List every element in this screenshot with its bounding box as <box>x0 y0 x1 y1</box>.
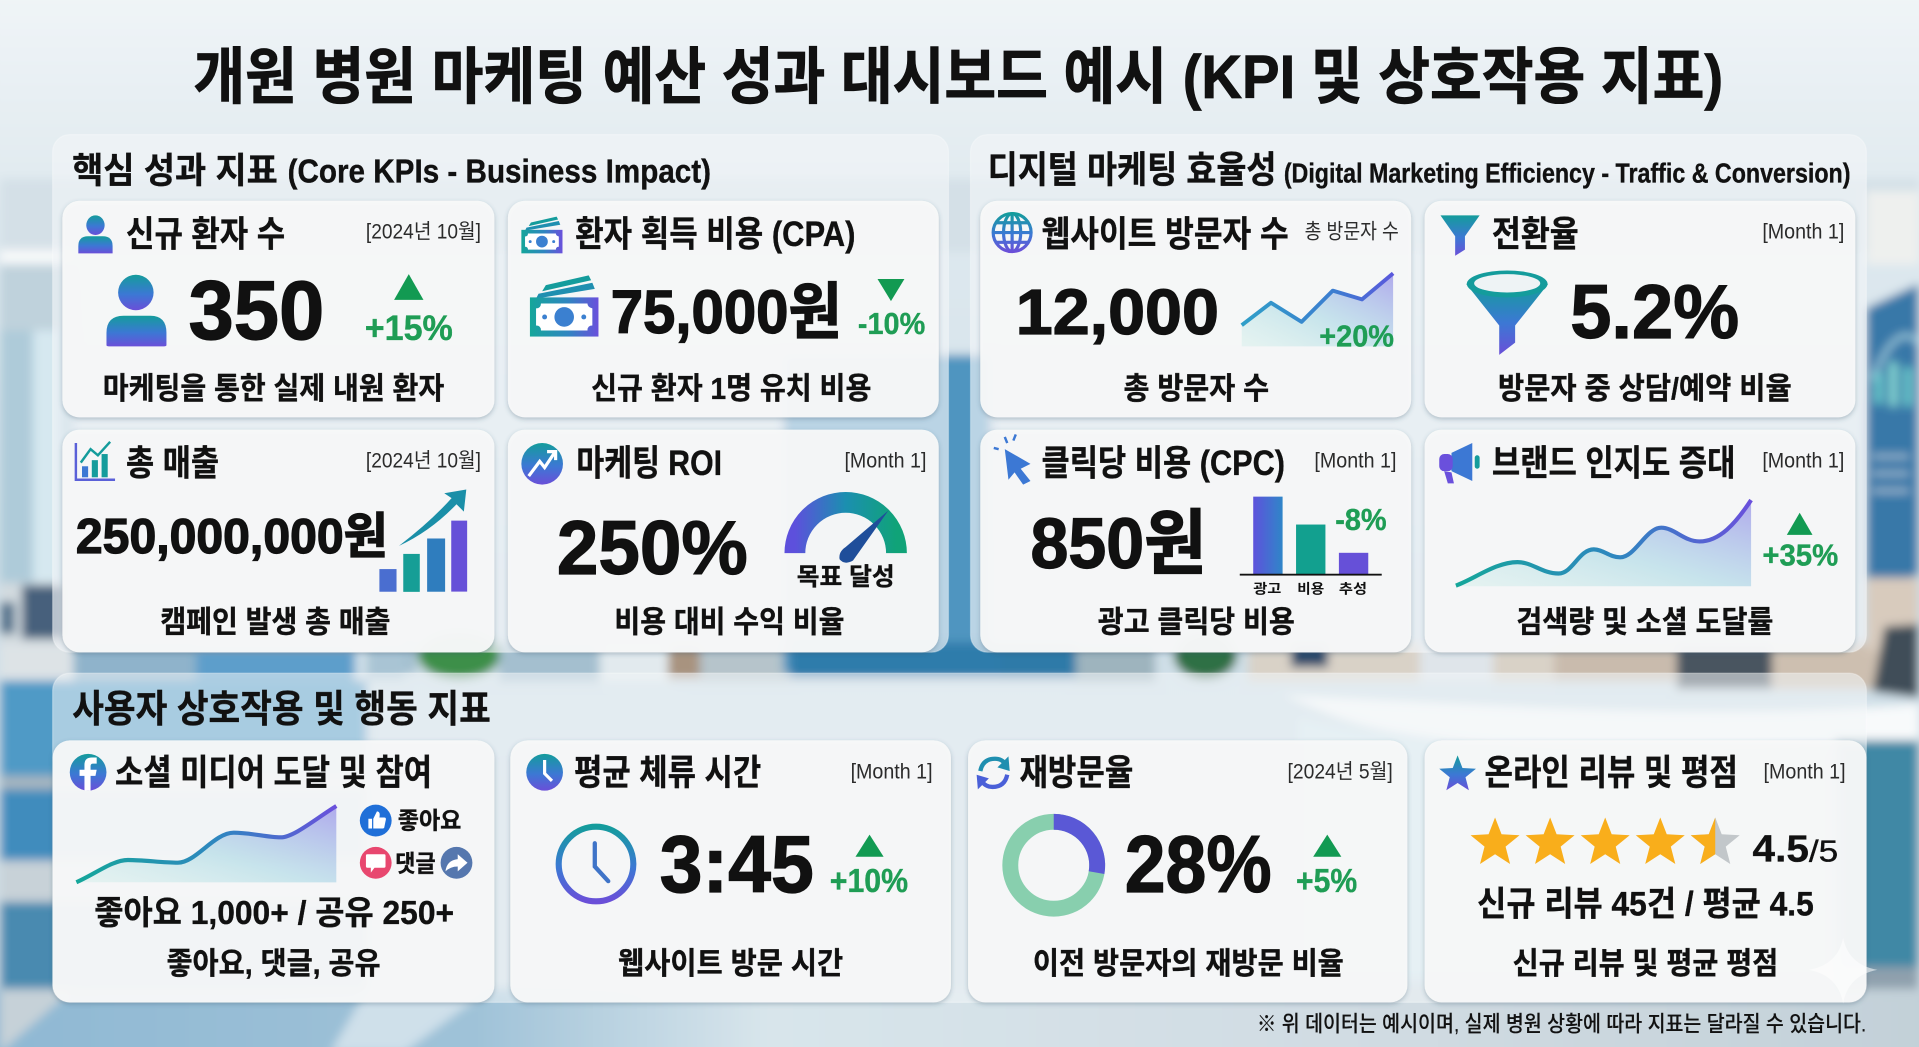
panel: core KPIs <box>53 135 948 652</box>
icon: likes: 좋아요 <box>398 808 461 834</box>
icon: clock large <box>559 827 633 901</box>
card: conversion rate: 5.2% <box>1570 270 1739 355</box>
card: return visit rate: 28% <box>1125 820 1272 910</box>
card: dwell time: 웹사이트 방문 시간 <box>618 947 843 981</box>
card: brand awareness: 검색량 및 소셜 도달률 <box>1516 606 1773 640</box>
card: dwell time: 3:45 <box>660 820 814 910</box>
heading: user interaction: 사용자 상호작용 및 행동 지표 <box>72 689 491 731</box>
card: CPA: 75,000원 <box>611 278 842 346</box>
card: marketing ROI: [Month 1] <box>844 450 926 473</box>
card: new patients: 신규 환자 수 <box>126 214 285 254</box>
chart: CPC bars: 추성 <box>1339 582 1367 597</box>
card: return visit rate: 재방문율 <box>1019 752 1133 792</box>
card: CPC: 광고 클릭당 비용 <box>1098 606 1295 640</box>
delta +10% <box>830 835 908 900</box>
card: CPC: 클릭당 비용 (CPC) <box>1041 443 1285 483</box>
heading: core KPIs: (Core KPIs - Business Impact) <box>288 153 711 190</box>
icon: cursor <box>994 434 1030 485</box>
rating value: 4.5 <box>1753 829 1809 871</box>
card: dwell time: 평균 체류 시간 <box>574 752 761 792</box>
card: conversion rate: 방문자 중 상담/예약 비율 <box>1498 372 1792 406</box>
icon: megaphone <box>1439 443 1480 483</box>
card: reviews: 온라인 리뷰 및 평점 <box>1485 752 1738 792</box>
rating value: /5 <box>1809 835 1838 869</box>
card: reviews: 신규 리뷰 45건 / 평균 4.5 <box>1477 885 1814 923</box>
icon: likes <box>360 805 461 836</box>
chart: visitors sparkline: +20% <box>1319 319 1394 353</box>
panel: digital marketing efficiency <box>971 135 1866 652</box>
card: total revenue: 총 매출 <box>126 443 219 483</box>
chart: growth bars with arrow <box>379 490 467 592</box>
card: brand awareness <box>1425 430 1855 652</box>
card: CPA: 환자 획득 비용 (CPA) <box>575 214 855 254</box>
card: CPC: 850원 <box>1030 505 1207 584</box>
icon: money small <box>521 217 562 253</box>
icon: comments and share <box>360 847 472 879</box>
chart: CPC bars: -8% <box>1335 503 1387 537</box>
card: total revenue: 캠페인 발생 총 매출 <box>160 606 390 640</box>
icon: ROI circle <box>521 443 563 485</box>
card: social media <box>53 740 494 1002</box>
card: CPC <box>980 430 1411 652</box>
icon: funnel small <box>1440 215 1480 256</box>
card: marketing ROI: 비용 대비 수익 비율 <box>614 606 844 640</box>
chart: social reach <box>76 806 336 882</box>
card: marketing ROI: 250% <box>557 506 748 591</box>
card: reviews: [Month 1] <box>1764 760 1846 783</box>
card: website visitors <box>980 201 1411 417</box>
delta -10% <box>858 279 925 341</box>
panel: user interaction <box>53 673 1866 1002</box>
gauge <box>795 502 896 591</box>
icon: person small <box>78 215 113 253</box>
card: brand awareness: 브랜드 인지도 증대 <box>1492 443 1735 483</box>
card: CPA: 신규 환자 1명 유치 비용 <box>591 372 871 406</box>
heading: digital marketing: 디지털 마케팅 효율성 <box>988 149 1276 190</box>
card: CPC: [Month 1] <box>1314 450 1396 473</box>
card: total revenue <box>62 430 494 652</box>
card: return visit rate: 이전 방문자의 재방문 비율 <box>1033 947 1344 981</box>
card: conversion rate <box>1425 201 1855 417</box>
card: website visitors: 총 방문자 수 <box>1123 372 1269 406</box>
chart: CPC bars: 광고 <box>1253 582 1281 597</box>
icon: clock small <box>526 754 563 791</box>
card: new patients <box>62 201 494 417</box>
delta +15%: +15% <box>365 308 453 348</box>
delta +10%: +10% <box>830 863 908 900</box>
gauge: 목표 달성 <box>797 563 895 591</box>
card: conversion rate: [Month 1] <box>1762 221 1844 244</box>
card: dwell time <box>510 740 951 1002</box>
delta +5% <box>1296 835 1357 900</box>
card: marketing ROI: 마케팅 ROI <box>576 443 722 483</box>
title: 개원 병원 마케팅 예산 성과 대시보드 예시 (KPI 및 상호작용 지표) <box>193 43 1723 111</box>
card: return visit rate: [2024년 5월] <box>1287 760 1393 783</box>
icon: refresh <box>977 756 1010 789</box>
icon: funnel large <box>1466 270 1548 355</box>
card: new patients: 350 <box>188 264 324 357</box>
chart: brand trend <box>1456 500 1751 586</box>
card: website visitors: 12,000 <box>1016 277 1219 348</box>
card: CPA <box>508 201 939 417</box>
icon: globe <box>993 214 1031 252</box>
icon: money large <box>530 275 598 337</box>
delta +5%: +5% <box>1296 863 1357 900</box>
heading: core KPIs: 핵심 성과 지표 <box>72 150 278 190</box>
delta +15% <box>365 274 453 348</box>
icon: sparkle watermark <box>1809 937 1877 1004</box>
heading: digital marketing <box>988 149 1850 190</box>
card: social media: 소셜 미디어 도달 및 참여 <box>115 752 432 792</box>
icon: facebook <box>70 754 106 791</box>
card: website visitors: 총 방문자 수 <box>1305 221 1399 244</box>
icon: person large <box>106 275 166 346</box>
delta +35% <box>1762 513 1838 572</box>
card: brand awareness: [Month 1] <box>1762 450 1844 473</box>
icon: comments and share: 댓글 <box>395 850 436 876</box>
delta +35%: +35% <box>1762 538 1838 572</box>
card: conversion rate: 전환율 <box>1492 214 1579 254</box>
card: marketing ROI <box>508 430 939 652</box>
chart: visitors sparkline <box>1242 273 1394 353</box>
card: total revenue: [2024년 10월] <box>366 450 481 473</box>
icon: star small <box>1439 755 1476 790</box>
rating value <box>1753 829 1838 871</box>
card: website visitors: 웹사이트 방문자 수 <box>1041 214 1289 254</box>
chart: donut 28% <box>1010 822 1097 909</box>
card: new patients: 마케팅을 통한 실제 내원 환자 <box>103 372 444 406</box>
card: total revenue: 250,000,000원 <box>76 510 388 564</box>
chart: CPC bars <box>1240 497 1387 597</box>
card: reviews <box>1425 740 1866 1002</box>
rating stars <box>1471 818 1740 864</box>
heading: core KPIs <box>72 150 711 190</box>
card: dwell time: [Month 1] <box>851 760 933 783</box>
delta -10%: -10% <box>858 307 925 341</box>
chart: CPC bars: 비용 <box>1297 582 1324 597</box>
card: reviews: 신규 리뷰 및 평균 평점 <box>1513 947 1778 981</box>
icon: chart small <box>76 442 115 480</box>
card: social media: 좋아요, 댓글, 공유 <box>166 947 381 981</box>
card: new patients: [2024년 10월] <box>366 221 481 244</box>
card: return visit rate <box>968 740 1407 1002</box>
card: social media: 좋아요 1,000+ / 공유 250+ <box>94 895 454 932</box>
